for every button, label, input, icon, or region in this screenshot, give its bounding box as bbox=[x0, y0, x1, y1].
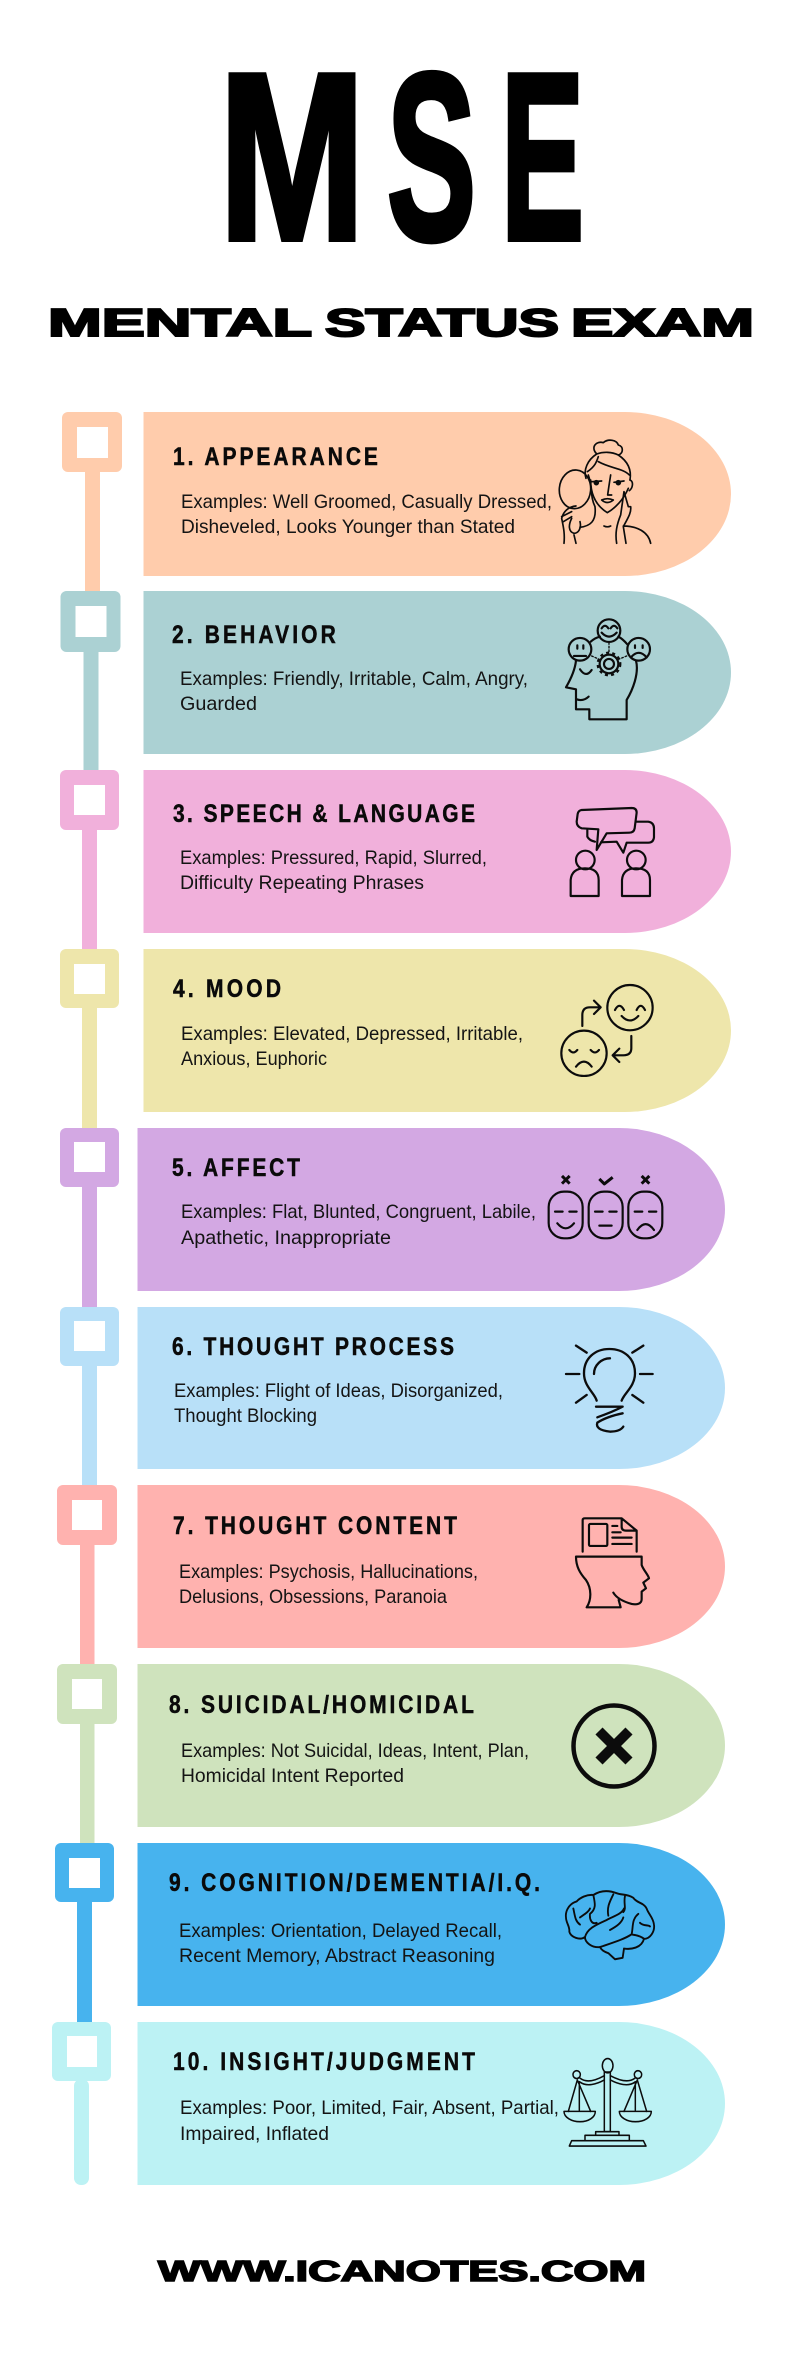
panel: 3 speech and language: Difficulty Repeating Phrases bbox=[180, 872, 424, 894]
icon: two people talking bbox=[571, 808, 654, 896]
panel: 3 speech and language bbox=[144, 770, 731, 933]
timeline node 10 bbox=[52, 2022, 111, 2185]
panel: 2 behavior: Guarded bbox=[180, 693, 257, 715]
panel: 3 speech and language: 3. SPEECH & LANGUAGE bbox=[173, 799, 475, 827]
panel: 6 thought process bbox=[138, 1307, 725, 1469]
panel: 5 affect: Examples: Flat, Blunted, Congruent, Labile, bbox=[181, 1201, 536, 1223]
panel: 9 cognition: 9. COGNITION/DEMENTIA/I.Q. bbox=[169, 1868, 540, 1896]
panel: 10 insight judgment: Impaired, Inflated bbox=[180, 2123, 329, 2145]
panel: 2 behavior bbox=[144, 591, 731, 754]
title: MSE: E bbox=[501, 25, 584, 290]
panel: 2 behavior: Examples: Friendly, Irritable, Calm, Angry, bbox=[180, 668, 528, 690]
panel: 8 suicidal homicidal bbox=[138, 1664, 725, 1827]
panel: 10 insight judgment: 10. INSIGHT/JUDGMENT bbox=[173, 2047, 475, 2075]
icon: head with document bbox=[576, 1518, 649, 1607]
panel: 10 insight judgment: Examples: Poor, Limited, Fair, Absent, Partial, bbox=[180, 2097, 559, 2119]
icon: mood swing faces bbox=[561, 985, 653, 1076]
panel: 7 thought content: Delusions, Obsessions, Paranoia bbox=[179, 1586, 447, 1608]
icon: circled X bbox=[574, 1706, 654, 1786]
panel: 5 affect bbox=[138, 1128, 725, 1291]
panel: 7 thought content: 7. THOUGHT CONTENT bbox=[173, 1511, 457, 1539]
title: MSE: S bbox=[387, 25, 476, 290]
icon: three masks bbox=[549, 1176, 662, 1238]
footer: website: WWW.ICANOTES.COM bbox=[158, 2256, 646, 2288]
timeline node 6 bbox=[60, 1307, 119, 1486]
panel: 9 cognition bbox=[138, 1843, 725, 2006]
panel: 8 suicidal homicidal: 8. SUICIDAL/HOMICIDAL bbox=[169, 1690, 474, 1718]
panel: 4 mood: Examples: Elevated, Depressed, Irritable, bbox=[181, 1023, 523, 1045]
panel: 4 mood bbox=[144, 949, 731, 1112]
panel: 4 mood: 4. MOOD bbox=[173, 974, 281, 1002]
timeline node 5 bbox=[60, 1128, 119, 1308]
panel: 8 suicidal homicidal: Homicidal Intent Reported bbox=[181, 1765, 404, 1787]
panel: 6 thought process: Thought Blocking bbox=[174, 1405, 317, 1427]
subtitle: Mental Status Exam bbox=[48, 302, 754, 345]
title: MSE bbox=[219, 25, 584, 290]
panel: 10 insight judgment bbox=[138, 2022, 725, 2185]
timeline node 2 bbox=[60, 591, 120, 772]
subtitle: Mental Status Exam: STATUS bbox=[325, 302, 559, 345]
timeline node 1 bbox=[62, 412, 122, 592]
panel: 6 thought process: Examples: Flight of Ideas, Disorganized, bbox=[174, 1380, 503, 1402]
panel: 6 thought process: 6. THOUGHT PROCESS bbox=[172, 1332, 454, 1360]
panel: 9 cognition: Recent Memory, Abstract Reasoning bbox=[179, 1945, 495, 1967]
timeline node 3 bbox=[60, 770, 119, 950]
panel: 8 suicidal homicidal: Examples: Not Suicidal, Ideas, Intent, Plan, bbox=[181, 1740, 529, 1762]
icon: brain bbox=[566, 1891, 654, 1959]
icon: woman with mirror bbox=[558, 440, 651, 543]
timeline node 7 bbox=[57, 1485, 117, 1665]
panel: 9 cognition: Examples: Orientation, Delayed Recall, bbox=[179, 1920, 502, 1942]
panel: 5 affect: 5. AFFECT bbox=[172, 1153, 300, 1181]
icon: head with emotions bbox=[566, 619, 650, 719]
panel: 7 thought content bbox=[138, 1485, 725, 1648]
panel: 1 appearance: 1. APPEARANCE bbox=[173, 442, 378, 470]
icon: light bulb bbox=[566, 1346, 653, 1432]
panel: 1 appearance: Disheveled, Looks Younger than Stated bbox=[181, 516, 515, 538]
icon: scales of justice bbox=[564, 2059, 651, 2146]
panel: 2 behavior: 2. BEHAVIOR bbox=[172, 620, 336, 648]
timeline node 4 bbox=[60, 949, 119, 1129]
timeline node 9 bbox=[55, 1843, 114, 2023]
panel: 1 appearance: Examples: Well Groomed, Casually Dressed, bbox=[181, 491, 552, 513]
panel: 5 affect: Apathetic, Inappropriate bbox=[181, 1227, 391, 1249]
panel: 3 speech and language: Examples: Pressured, Rapid, Slurred, bbox=[180, 847, 487, 869]
subtitle: Mental Status Exam: EXAM bbox=[571, 302, 754, 345]
panel: 7 thought content: Examples: Psychosis, Hallucinations, bbox=[179, 1561, 478, 1583]
subtitle: Mental Status Exam: MENTAL bbox=[48, 302, 312, 345]
panel: 4 mood: Anxious, Euphoric bbox=[181, 1048, 327, 1070]
timeline node 8 bbox=[57, 1664, 117, 1844]
title: MSE: M bbox=[219, 25, 365, 290]
panel: 1 appearance bbox=[144, 412, 731, 576]
